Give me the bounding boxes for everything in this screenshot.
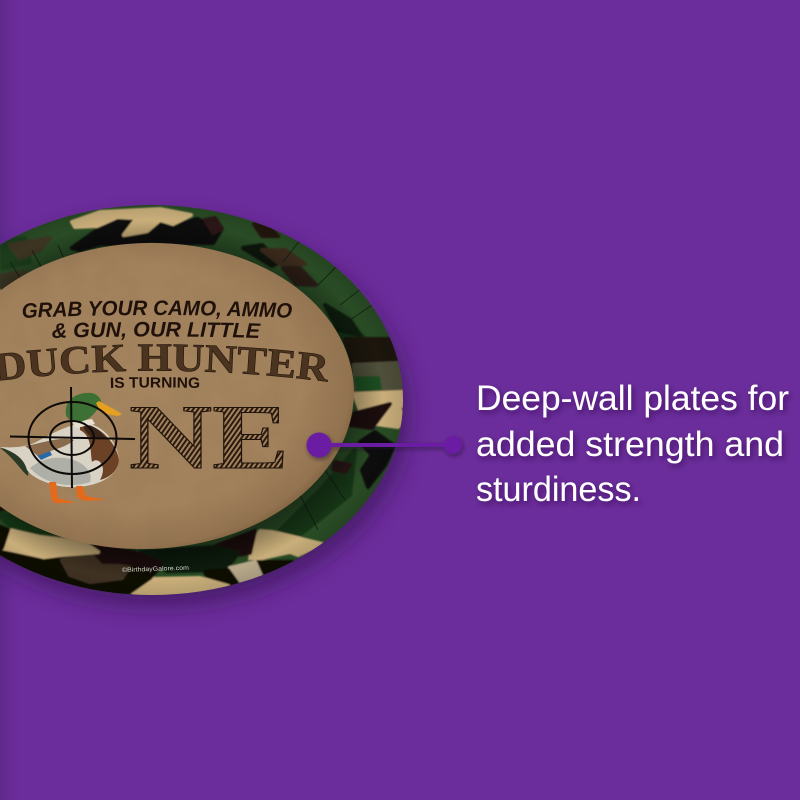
icon: duck	[0, 393, 122, 503]
rim folds	[10, 240, 372, 530]
callout text: Deep-wall plates for	[476, 379, 789, 418]
icon: crosshair	[10, 387, 135, 488]
callout text	[476, 379, 789, 509]
plate shadow	[0, 217, 409, 607]
plate	[0, 205, 403, 595]
copyright: ©BirthdayGalore.com	[122, 564, 189, 574]
camo rim	[0, 205, 403, 595]
plate text: grab your camo	[22, 300, 292, 340]
plate text: one: NE	[129, 386, 289, 488]
callout connector	[306, 432, 462, 458]
inner paper well	[0, 235, 360, 557]
plate text: duck hunter: DUCK HUNTER	[0, 344, 328, 382]
plate text: grab your camo: GRAB YOUR CAMO, AMMO	[22, 300, 292, 319]
plate text: is turning: IS TURNING	[110, 377, 200, 388]
plate text: grab your camo: & GUN, OUR LITTLE	[52, 322, 261, 340]
callout text: sturdiness.	[476, 470, 641, 509]
callout text: added strength and	[476, 425, 784, 464]
